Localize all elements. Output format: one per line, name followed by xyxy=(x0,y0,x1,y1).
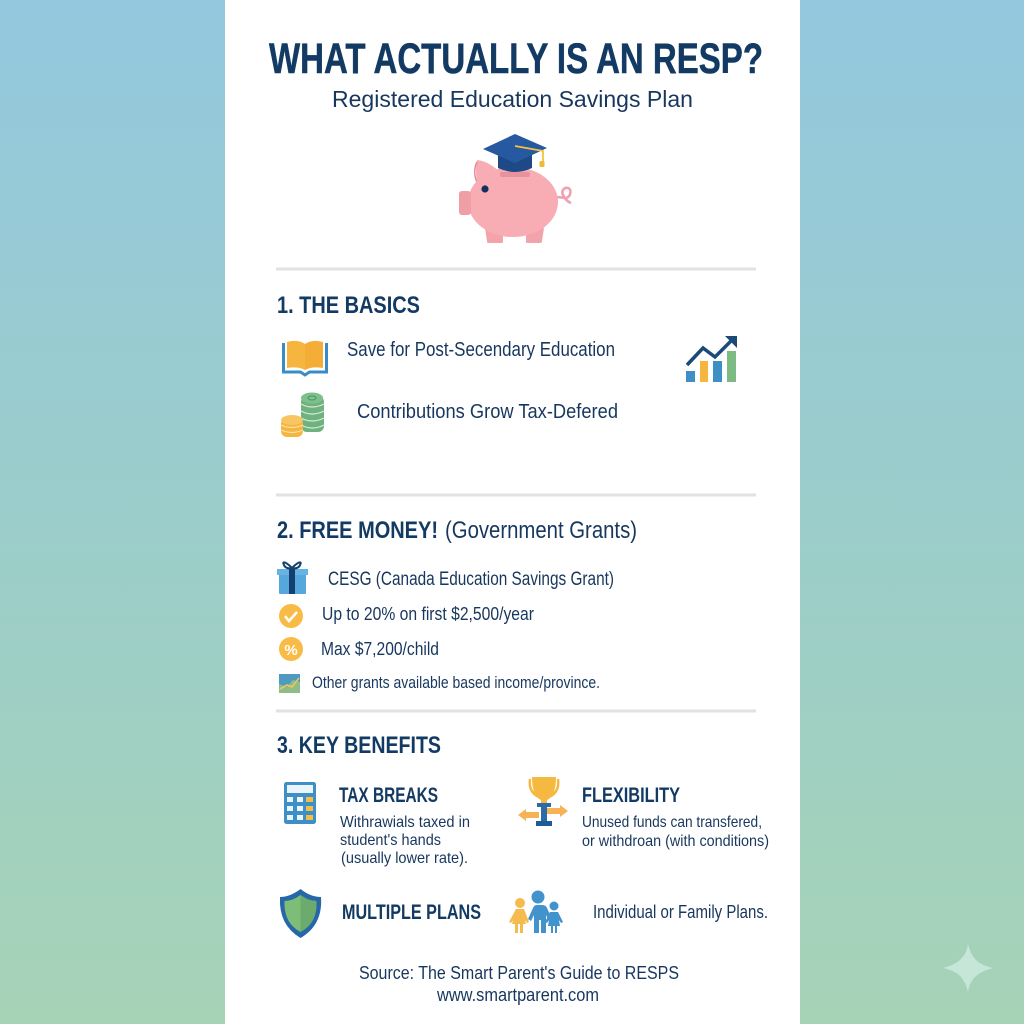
benefit: tax breaks: Withrawials taxed in xyxy=(340,814,470,831)
text: up to 20%: Up to 20% on first $2,500/year xyxy=(322,603,534,624)
benefit: flexibility: FLEXIBILITY xyxy=(582,783,680,807)
title: WHAT ACTUALLY IS AN RESP? xyxy=(269,36,763,83)
icon: percent badge xyxy=(279,637,303,661)
text: max per child: Max $7,200/child xyxy=(321,638,439,659)
benefit: tax breaks xyxy=(339,783,470,867)
subtitle: Registered Education Savings Plan xyxy=(332,86,693,112)
icon: gift xyxy=(277,562,308,594)
text: cesg: CESG (Canada Education Savings Grant) xyxy=(328,569,614,590)
icon: calculator xyxy=(284,782,316,824)
section 3 heading: 3. KEY BENEFITS xyxy=(277,732,441,759)
text: contributions grow: Contributions Grow Tax-Defered xyxy=(357,401,618,423)
divider xyxy=(276,710,756,712)
heading: multiple plans: MULTIPLE PLANS xyxy=(342,900,481,924)
icon: piggy bank with graduation cap xyxy=(459,134,571,243)
icon: percent badge: % xyxy=(284,642,298,659)
source footer xyxy=(359,963,679,1005)
background right band xyxy=(800,0,1024,1024)
icon: open book xyxy=(284,341,326,375)
section 2 heading: (Government Grants) xyxy=(445,517,637,544)
benefit: tax breaks: (usually lower rate). xyxy=(341,850,468,867)
text: individual or family: Individual or Family Plans. xyxy=(593,902,768,922)
source footer: Source: The Smart Parent's Guide to RESPS xyxy=(359,963,679,983)
text: save for post-secondary: Save for Post-Secendary Education xyxy=(347,339,615,361)
background left band xyxy=(0,0,225,1024)
benefit: tax breaks: student's hands xyxy=(340,832,441,849)
icon: coin stacks xyxy=(281,392,324,437)
benefit: tax breaks: TAX BREAKS xyxy=(339,783,438,807)
source footer: www.smartparent.com xyxy=(436,985,599,1005)
icon: family xyxy=(509,890,563,933)
icon: check badge xyxy=(279,604,303,628)
icon: sparkle xyxy=(943,944,993,992)
divider xyxy=(276,494,756,496)
central white panel xyxy=(225,0,800,1024)
benefit: flexibility xyxy=(582,783,769,850)
benefit: flexibility: or withdroan (with conditions) xyxy=(582,833,769,850)
section 1 heading: 1. THE BASICS xyxy=(277,292,420,319)
icon: map xyxy=(279,674,300,693)
section 2 heading xyxy=(277,517,637,544)
text: other grants: Other grants available based income/province. xyxy=(312,673,600,692)
section 2 heading: 2. FREE MONEY! xyxy=(277,517,438,544)
benefit: flexibility: Unused funds can transfered, xyxy=(582,814,762,831)
divider xyxy=(276,268,756,270)
icon: shield xyxy=(280,889,321,938)
icon: trophy with arrows xyxy=(518,777,568,826)
icon: growth chart xyxy=(686,336,737,382)
